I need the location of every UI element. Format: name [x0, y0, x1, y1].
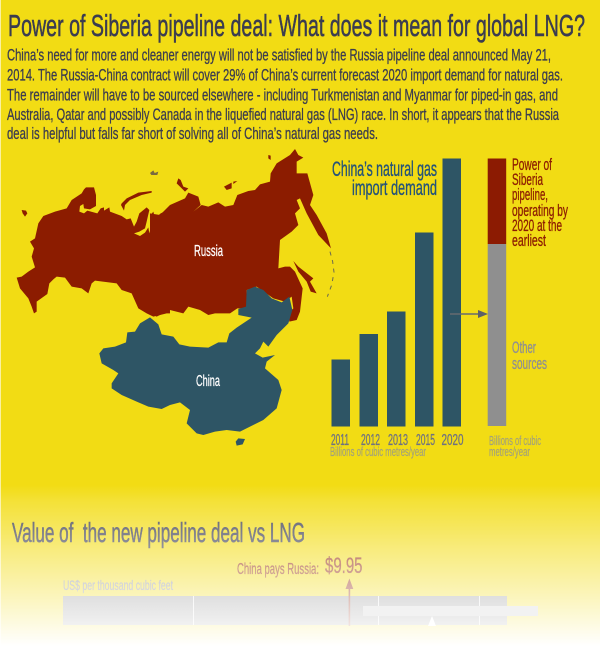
- axis unit label: US$ per thousand cubic feet: [63, 577, 173, 593]
- intro text block: [7, 46, 563, 143]
- segment: Power of Siberia: [488, 158, 506, 244]
- year labels: 2011: [331, 432, 349, 449]
- label: Power of Siberia pipeline: Siberia: [512, 171, 543, 189]
- axis unit label: Billions of cubic metres/year: [330, 444, 426, 459]
- callout: China pays Russia: China pays Russia:: [237, 561, 319, 578]
- map region: Russia: [17, 149, 334, 322]
- year labels: 2015: [416, 432, 435, 449]
- map label: China: China: [196, 373, 220, 390]
- label: Power of Siberia pipeline: earliest: [512, 232, 546, 250]
- stacked bar: sources of 2020 demand: [488, 156, 568, 459]
- fade overlay: [0, 485, 600, 646]
- callout: China pays Russia: $9.95: [325, 553, 362, 578]
- price range bar: [63, 596, 507, 625]
- section heading: Value of the new pipeline deal vs LNG: [12, 517, 305, 548]
- year labels: 2020: [442, 432, 464, 449]
- arrow: $9.95 marker: [346, 578, 353, 626]
- label: Power of Siberia pipeline: pipeline,: [512, 186, 548, 204]
- bar chart: China's natural gas import demand: [330, 158, 464, 459]
- chart title: [332, 158, 437, 200]
- chart title: China’s natural gas: [332, 158, 437, 181]
- map: Russia and China: [17, 149, 334, 446]
- label: Power of Siberia pipeline: Power of: [512, 156, 552, 174]
- year labels: 2012: [361, 432, 380, 449]
- chart title: import demand: [352, 177, 437, 200]
- label: Power of Siberia pipeline: 2020 at the: [512, 217, 562, 235]
- year labels: [331, 432, 464, 449]
- left edge: [0, 0, 1, 646]
- label: Power of Siberia pipeline: [512, 156, 568, 250]
- LNG range bar: [363, 606, 538, 616]
- map label: Russia: Russia: [194, 243, 223, 260]
- stacked bar unit label: [489, 433, 541, 459]
- stacked bar unit label: Billions of cubic: [489, 433, 541, 448]
- bars: [332, 158, 461, 426]
- callout: China pays Russia: [237, 553, 362, 578]
- label: other sources: Other: [512, 339, 536, 357]
- label: other sources: [512, 339, 547, 373]
- year labels: 2013: [388, 432, 408, 449]
- arrow: 2020 demand to breakdown: [450, 310, 488, 318]
- stacked bar unit label: metres/year: [489, 444, 530, 459]
- map region: China: [99, 287, 292, 446]
- section: value of the deal vs LNG: [12, 517, 507, 626]
- marker: LNG price: [428, 616, 436, 626]
- segment: other sources: [488, 244, 506, 426]
- label: other sources: sources: [512, 355, 547, 373]
- intro text block: deal is helpful but falls far short of solving all of China’s natural gas needs.: [7, 124, 378, 143]
